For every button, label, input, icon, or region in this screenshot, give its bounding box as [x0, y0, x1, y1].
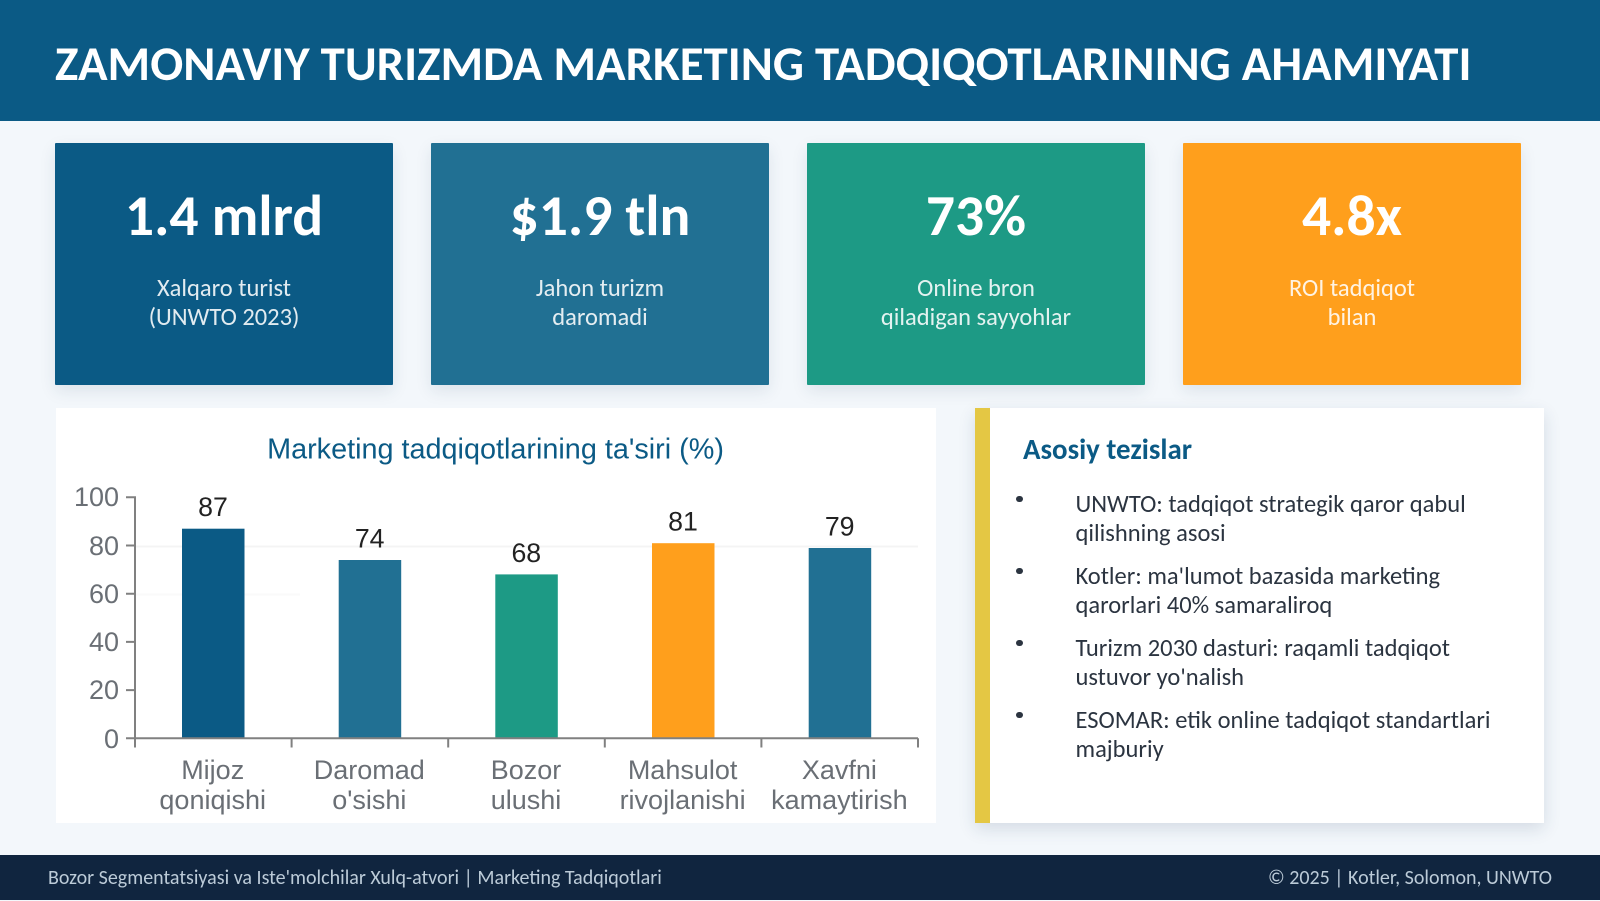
bar: Mijoz qoniqishi 87: 87 — [198, 492, 228, 522]
accent bar — [975, 408, 990, 823]
thesis text: qarorlari 40% samaraliroq — [1076, 590, 1332, 620]
y axis with labels: 80 — [89, 531, 119, 561]
x axis with labels: Xavfni — [802, 755, 877, 785]
x axis with labels: ulushi — [491, 785, 561, 815]
header banner — [0, 0, 1600, 121]
stat label: Online bron — [917, 273, 1035, 303]
footer bar — [0, 855, 1600, 900]
y axis with labels: 20 — [89, 675, 119, 705]
card: tourism revenue — [431, 143, 769, 385]
bullet dot — [1016, 496, 1022, 502]
stat value: 4.8x — [1302, 180, 1402, 250]
y axis with labels: 0 — [104, 724, 119, 754]
stat label: Xalqaro turist — [157, 273, 291, 303]
stat label: ROI tadqiqot — [1289, 273, 1415, 303]
y axis with labels: 40 — [89, 627, 119, 657]
bar: Mijoz qoniqishi 87 — [182, 492, 244, 738]
panel: bar chart — [56, 408, 936, 823]
thesis text: majburiy — [1076, 734, 1164, 764]
thesis 2 — [1016, 560, 1440, 620]
thesis 1 — [1016, 488, 1466, 548]
thesis 4 — [1016, 704, 1490, 764]
stat label: (UNWTO 2023) — [149, 302, 299, 332]
bar: Xavfni kamaytirish 79: 79 — [825, 512, 855, 542]
bar: Xavfni kamaytirish 79 — [809, 512, 871, 738]
stat label — [1289, 273, 1415, 332]
stat label: Jahon turizm — [536, 273, 664, 303]
stat label — [536, 273, 664, 332]
card: online booking — [807, 143, 1145, 385]
footer right text: © 2025 | Kotler, Solomon, UNWTO — [1268, 866, 1552, 890]
y axis with labels — [74, 482, 135, 754]
panel heading: Asosiy tezislar — [1023, 431, 1192, 467]
thesis text — [1076, 560, 1440, 620]
x axis with labels — [135, 738, 918, 815]
bar: Daromad o'sishi 74: 74 — [355, 524, 385, 554]
stat label: daromadi — [552, 302, 648, 332]
x axis with labels: o'sishi — [332, 785, 406, 815]
bar: Bozor ulushi 68: 68 — [511, 538, 541, 568]
stat value: 73% — [926, 180, 1026, 250]
stat label: qiladigan sayyohlar — [881, 302, 1071, 332]
thesis text — [1076, 632, 1450, 692]
stat label — [149, 273, 299, 332]
thesis text: ustuvor yo'nalish — [1076, 662, 1244, 692]
x axis with labels: Mijoz — [181, 755, 244, 785]
bar: Bozor ulushi 68 — [495, 538, 558, 738]
stat value: 1.4 mlrd — [125, 180, 323, 250]
thesis text — [1076, 704, 1490, 764]
thesis text — [1076, 488, 1466, 548]
bullet dot — [1016, 568, 1022, 574]
x axis with labels: rivojlanishi — [620, 785, 746, 815]
footer left text: Bozor Segmentatsiyasi va Iste'molchilar Xulq-atvori | Marketing Tadqiqotlari — [48, 866, 662, 890]
stat cards row — [52, 143, 1524, 394]
x axis with labels: Mahsulot — [628, 755, 738, 785]
bar: Mahsulot rivojlanishi 81 — [652, 506, 714, 738]
thesis text: qilishning asosi — [1076, 518, 1226, 548]
thesis text: UNWTO: tadqiqot strategik qaror qabul — [1076, 488, 1466, 518]
bar: Daromad o'sishi 74 — [339, 524, 401, 738]
bullet list — [1016, 488, 1490, 764]
stat label: bilan — [1328, 302, 1376, 332]
x axis with labels: qoniqishi — [159, 785, 266, 815]
stat value: $1.9 tln — [510, 180, 690, 250]
stat label — [881, 273, 1071, 332]
x axis with labels: Bozor — [491, 755, 561, 785]
thesis text: Kotler: ma'lumot bazasida marketing — [1076, 560, 1440, 590]
bar: Mahsulot rivojlanishi 81: 81 — [668, 506, 698, 536]
thesis text: Turizm 2030 dasturi: raqamli tadqiqot — [1076, 632, 1450, 662]
bullet dot — [1016, 712, 1022, 718]
thesis 3 — [1016, 632, 1450, 692]
y axis with labels: 60 — [89, 579, 119, 609]
x axis with labels: Daromad — [314, 755, 425, 785]
card: ROI — [1183, 143, 1521, 385]
thesis text: ESOMAR: etik online tadqiqot standartlari — [1076, 704, 1490, 734]
panel: key theses — [975, 408, 1544, 823]
x axis with labels: kamaytirish — [771, 785, 908, 815]
card: international tourists — [55, 143, 393, 385]
y axis with labels: 100 — [74, 482, 119, 512]
title: ZAMONAVIY TURIZMDA MARKETING TADQIQOTLARINING AHAMIYATI — [55, 35, 1471, 94]
chart title: Marketing tadqiqotlarining ta'siri (%) — [267, 434, 724, 466]
bullet dot — [1016, 640, 1022, 646]
